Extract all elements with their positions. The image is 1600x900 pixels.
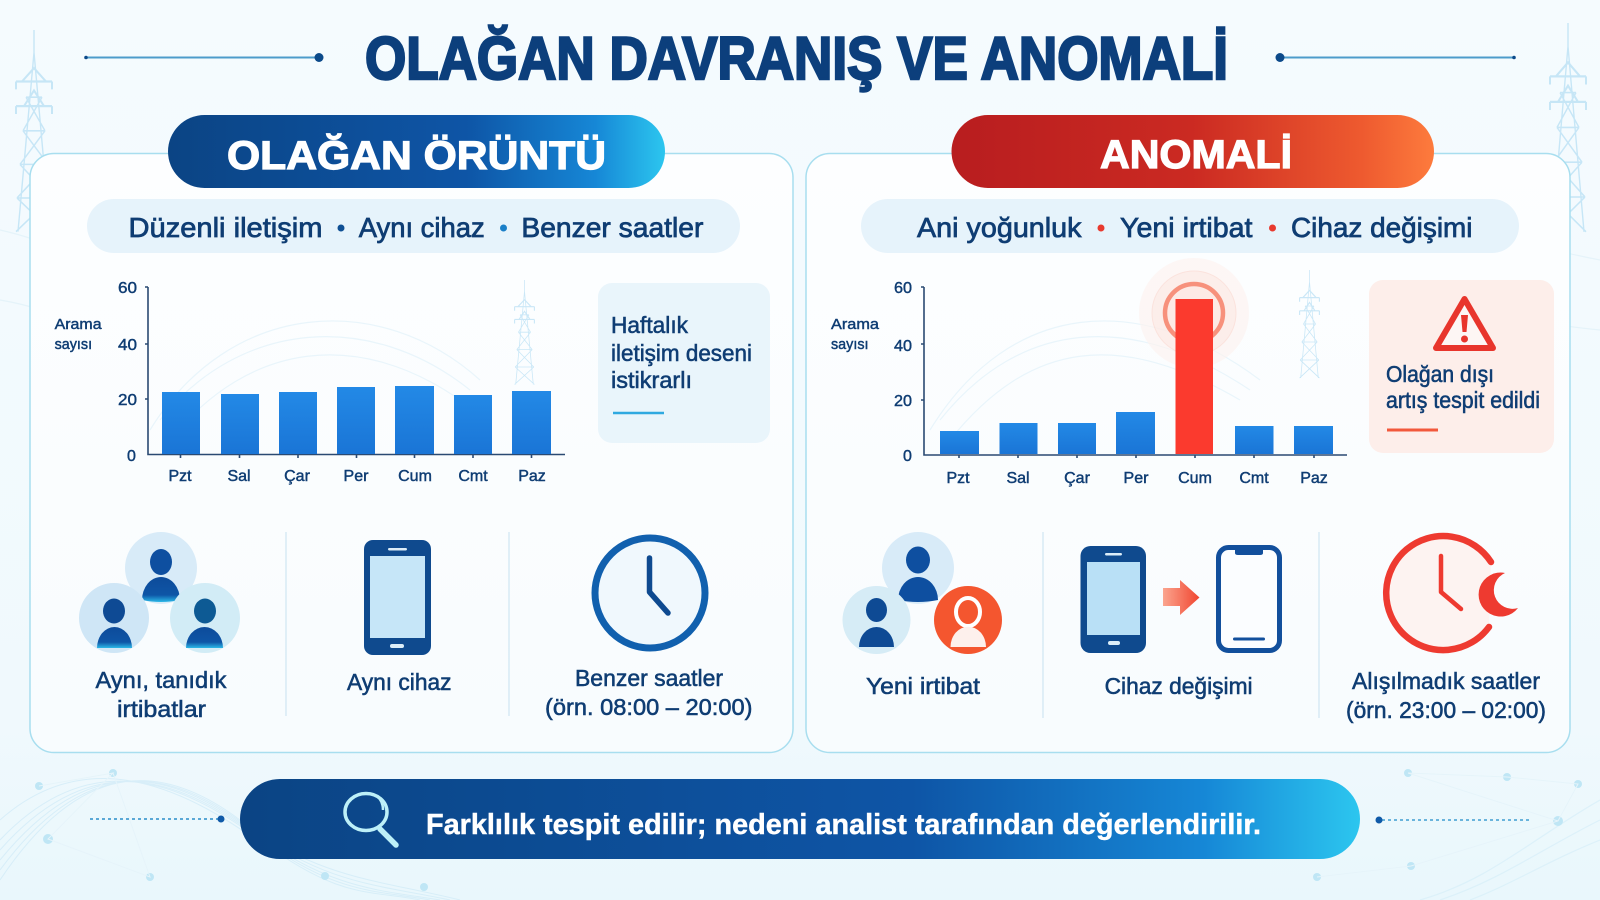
y ticks: 0 — [127, 448, 136, 465]
red peak bar — [1176, 299, 1213, 454]
label: similar hours: (örn. 08:00 – 20:00) — [545, 694, 752, 720]
day labels: Per — [344, 468, 369, 485]
bottom connector right — [1376, 816, 1530, 824]
day labels: Cum — [1178, 470, 1212, 487]
y ticks: 0 — [903, 448, 912, 465]
summary pill: Ani yoğunluk — [917, 212, 1083, 243]
panel: olağan örüntü — [30, 115, 793, 752]
chart tower — [515, 280, 534, 384]
background tower right — [1550, 23, 1586, 232]
day labels: Per — [1124, 470, 1149, 487]
day labels: Paz — [1300, 470, 1328, 487]
label: familiar contacts: irtibatlar — [117, 696, 206, 722]
icon: familiar contacts — [79, 532, 240, 653]
title: OLAĞAN DAVRANIŞ VE ANOMALİ — [365, 25, 1228, 92]
alert box: Olağan dışı — [1386, 361, 1494, 387]
day labels: Paz — [518, 468, 546, 485]
label: unusual hours: (örn. 23:00 – 02:00) — [1346, 697, 1546, 723]
y ticks: 20 — [118, 392, 137, 409]
background tower left — [16, 30, 52, 232]
panel: anomali — [806, 115, 1570, 752]
heading pill: ANOMALİ — [1100, 133, 1292, 177]
day labels: Cmt — [458, 468, 488, 485]
label: unusual hours — [1346, 668, 1546, 723]
summary pill: Aynı cihaz — [359, 212, 485, 243]
note box: Haftalık — [611, 312, 688, 338]
label: similar hours — [545, 665, 752, 720]
label: device change: Cihaz değişimi — [1105, 673, 1253, 699]
bar chart: haftalık arama — [55, 280, 565, 485]
bar chart: anomali — [831, 280, 1347, 487]
y axis title: Arama — [831, 316, 880, 333]
title ornament right — [1276, 53, 1516, 62]
note box: istikrarlı — [611, 367, 692, 393]
note box: iletişim deseni — [611, 340, 752, 366]
dividers — [1043, 532, 1319, 718]
y ticks: 60 — [894, 280, 912, 297]
summary pill — [861, 199, 1519, 253]
heading pill — [952, 115, 1434, 188]
day labels: Sal — [227, 468, 251, 485]
label: unusual hours: Alışılmadık saatler — [1352, 668, 1540, 694]
blue bars — [940, 412, 1333, 454]
conclusion banner: Farklılık tespit edilir; nedeni analist tarafından değerlendirilir. — [426, 809, 1261, 841]
y ticks: 20 — [894, 393, 912, 410]
icon: magnifier — [345, 794, 396, 845]
label: familiar contacts: Aynı, tanıdık — [96, 667, 227, 693]
day labels — [168, 468, 546, 485]
old phone — [1080, 546, 1146, 653]
icon: warning triangle — [1436, 299, 1493, 348]
heading pill — [168, 115, 665, 188]
day labels: Pzt — [168, 468, 192, 485]
note box — [598, 283, 770, 443]
summary pill: Benzer saatler — [521, 212, 703, 243]
y ticks — [118, 280, 137, 465]
y axis title: sayısı — [55, 336, 92, 353]
bars — [162, 386, 551, 454]
axes — [921, 287, 1347, 458]
icon: night clock — [1386, 536, 1518, 650]
y ticks: 60 — [118, 280, 137, 297]
y axis title — [831, 316, 880, 353]
dividers — [286, 532, 509, 716]
label: familiar contacts — [96, 667, 227, 722]
icon: clock — [595, 538, 705, 648]
peak glow — [1139, 258, 1249, 368]
summary pill: Düzenli iletişim — [128, 212, 322, 243]
day labels: Cmt — [1239, 470, 1269, 487]
icon: device change — [1080, 546, 1280, 653]
y ticks: 40 — [118, 337, 137, 354]
label: same device: Aynı cihaz — [347, 669, 452, 695]
arrow — [1163, 580, 1200, 615]
chart tower — [1300, 270, 1319, 378]
new phone — [1218, 548, 1280, 650]
alert box: artış tespit edildi — [1386, 387, 1540, 413]
conclusion banner — [240, 779, 1360, 859]
y ticks: 40 — [894, 338, 912, 355]
y axis title: Arama — [55, 316, 102, 333]
axes — [145, 287, 565, 458]
day labels: Pzt — [946, 470, 970, 487]
day labels: Çar — [284, 468, 311, 485]
y axis title — [55, 316, 102, 353]
summary pill: Cihaz değişimi — [1291, 212, 1472, 243]
day labels: Sal — [1006, 470, 1030, 487]
icon: new contact — [842, 532, 1002, 654]
summary pill — [87, 199, 740, 253]
alert box — [1369, 280, 1554, 453]
y axis title: sayısı — [831, 336, 868, 353]
icon: same phone — [364, 540, 431, 655]
summary pill: Yeni irtibat — [1120, 212, 1253, 243]
day labels — [946, 470, 1328, 487]
label: new contact: Yeni irtibat — [866, 673, 981, 699]
title ornament left — [84, 53, 324, 62]
day labels: Cum — [398, 468, 432, 485]
label: similar hours: Benzer saatler — [575, 665, 723, 691]
day labels: Çar — [1064, 470, 1091, 487]
y ticks — [894, 280, 912, 465]
bottom connector left — [90, 816, 224, 822]
heading pill: OLAĞAN ÖRÜNTÜ — [227, 132, 606, 178]
